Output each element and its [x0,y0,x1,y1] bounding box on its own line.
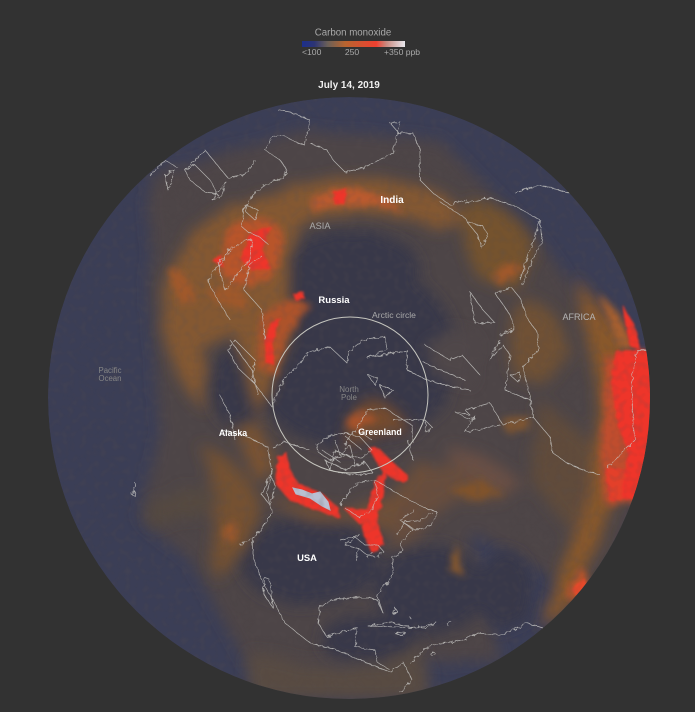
smoke core: highest concentration [293,488,330,510]
legend [302,28,420,57]
Great Lakes [340,535,384,560]
label: Greenland: Greenland [358,427,402,437]
brown mid-level haze [140,130,640,670]
place labels [99,195,596,563]
place labels: Ocean [99,374,121,383]
coast: Arabia and Middle East [440,185,570,285]
legend labels: +350 ppb [384,47,420,57]
coast: Europe and Mediterranean [495,288,600,475]
label: India: India [380,195,404,206]
coast: Greenland [345,408,433,460]
dark low-concentration areas [210,230,533,665]
label: Alaska: Alaska [219,428,247,438]
coast: Gulf of Mexico [318,598,390,670]
Arctic circle [272,317,428,473]
place labels: Pole [341,393,358,402]
date: July 14, 2019 [318,80,380,91]
coastlines [131,110,648,693]
coast: west USA and Central America [253,513,412,693]
label: Africa: AFRICA [562,312,596,322]
island: Hawaii [131,482,136,497]
label: USA: USA [297,552,317,563]
islands: south-east Asia [165,165,258,290]
label: Pacific Ocean: Pacific [99,366,122,375]
label: Arctic circle: Arctic circle [372,310,416,320]
data grain texture [180,186,650,594]
coast: east Asia [242,110,467,244]
label: Asia: ASIA [310,221,331,231]
legend labels: <100 [302,47,322,57]
coast: Siberia and Kamchatka [228,337,470,407]
coast: Caribbean and South America [410,623,543,663]
label: Russia: Russia [318,295,350,306]
carbon monoxide polar map [48,97,652,700]
map base disc [48,97,650,699]
coast: Alaska and Canada [220,430,310,545]
label: North Pole: North [339,385,359,394]
islands: Canadian Arctic Archipelago [317,433,373,475]
coast: Africa [607,350,648,468]
legend title: Carbon monoxide [315,28,391,38]
brighter orange areas [168,189,650,603]
red high-concentration fire plumes [212,188,652,598]
coast: Hudson Bay and eastern Canada [340,480,437,530]
orange moderate-concentration areas [150,178,625,700]
coast: east USA [377,513,433,613]
legend labels: 250 [345,47,359,57]
legend labels [302,47,420,57]
legend colour bar [302,41,405,47]
